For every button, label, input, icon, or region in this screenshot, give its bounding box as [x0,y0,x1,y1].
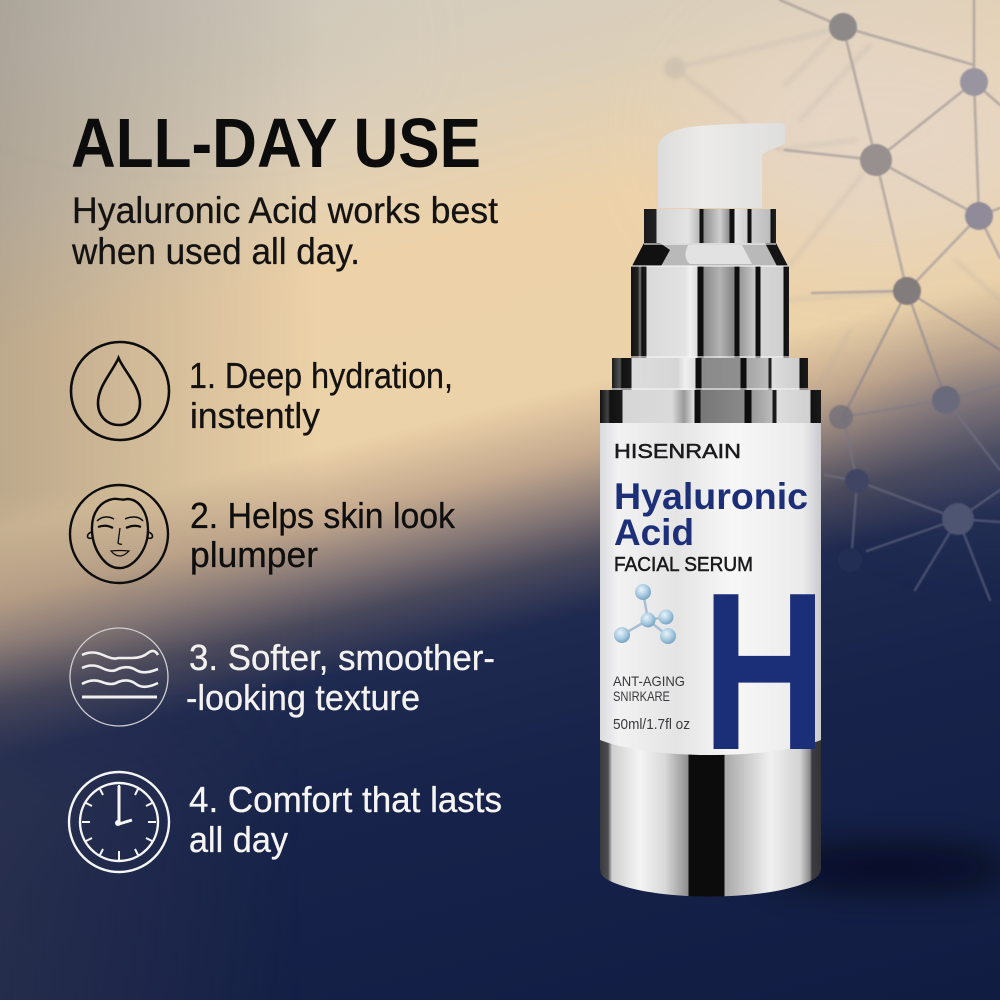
benefit 1 text [189,355,453,436]
subtitle: when used all day. [71,231,360,272]
upper strands [780,0,1000,293]
out-of-focus strands [664,27,1000,400]
benefit 3 [70,628,495,726]
icon: water drop [71,342,169,440]
benefit 1 text: 1. Deep hydration, [189,355,453,396]
icon: face [70,485,168,583]
benefit 2 text [190,495,456,575]
product name: Acid [614,512,694,553]
network nodes [829,13,993,572]
bottle shadow [770,850,1000,886]
white label [600,423,821,755]
benefit 1 [71,342,453,440]
subtitle: Hyaluronic Acid works best [72,190,499,231]
benefit 1 text: instently [190,395,320,436]
subtitle [71,190,499,272]
serum bottle [600,123,1000,896]
molecule icon [614,584,676,644]
icon: clock [69,772,169,872]
title: ALL-DAY USE [71,104,481,182]
benefit 2 [70,485,456,583]
benefit 2 text: 2. Helps skin look [190,495,456,536]
brand: HISENRAIN [614,441,741,463]
chrome collar [600,209,821,424]
product type: FACIAL SERUM [614,554,753,576]
benefit 3 text: -looking texture [186,677,420,718]
small print: 50ml/1.7fl oz [613,716,690,733]
benefit 4 [69,772,502,872]
benefit 4 text: 4. Comfort that lasts [189,779,502,820]
molecular network backdrop [664,0,1000,600]
benefit 4 text: all day [189,819,288,860]
product name: Hyaluronic [614,476,808,517]
small print: SNIRKARE [613,688,670,704]
product name [614,476,808,553]
lower strands [825,291,1000,600]
small print [613,673,690,733]
small print: ANT-AGING [613,673,685,689]
large H mark: H [702,546,827,797]
lower silver base [600,735,821,896]
benefit 3 text: 3. Softer, smoother- [189,637,495,678]
icon: smooth texture waves [70,628,168,726]
benefit 2 text: plumper [190,534,318,575]
pump head [658,123,785,208]
benefit 4 text [189,779,502,860]
benefit 3 text [186,637,495,718]
